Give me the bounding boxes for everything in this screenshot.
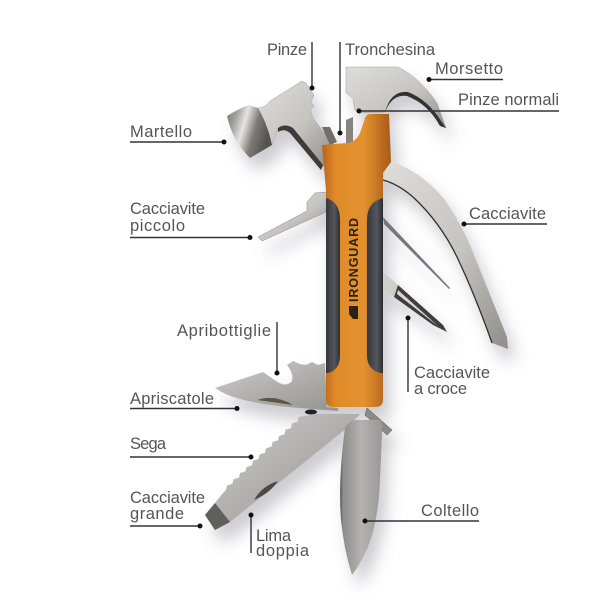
label: Pinze normali: Pinze normali — [458, 91, 559, 109]
tool: hammer — [227, 81, 332, 170]
label: Sega: Sega — [130, 435, 167, 453]
label: Cacciavite a croce — [406, 316, 490, 398]
shadow gap between blades — [305, 410, 317, 414]
label: Tronchesina — [338, 41, 436, 136]
tool: thin rod — [383, 217, 450, 289]
label: Cacciavite: Cacciavite — [469, 205, 546, 223]
label: Martello — [130, 123, 226, 144]
label: Cacciavite grande — [130, 489, 205, 528]
tool: phillips screwdriver — [383, 272, 447, 332]
tool: cacciavite curved — [383, 162, 508, 349]
label: Martello: Martello — [130, 123, 192, 141]
label: Cacciavite grande: Cacciavite — [130, 489, 205, 507]
label: Apriscatole: Apriscatole — [130, 390, 214, 408]
label: Coltello: Coltello — [421, 502, 479, 520]
grip left — [326, 198, 340, 373]
label: Cacciavite piccolo — [130, 200, 252, 240]
tool: knife — [340, 420, 382, 575]
label: Sega — [130, 435, 254, 460]
tool: bottle opener blade — [215, 361, 338, 411]
label: Apribottiglie — [177, 322, 280, 376]
brand: IRONGUARD — [347, 218, 361, 302]
tool: small tab — [365, 408, 392, 435]
label: Pinze normali — [356, 91, 559, 114]
label: Lima doppia: doppia — [256, 542, 310, 560]
label: Pinze — [267, 41, 314, 90]
label: Cacciavite piccolo: piccolo — [130, 217, 185, 235]
label: Cacciavite a croce: a croce — [414, 380, 467, 398]
grip right — [367, 198, 383, 373]
brand logo — [349, 306, 358, 319]
label: Morsetto: Morsetto — [435, 60, 503, 78]
label: Tronchesina: Tronchesina — [345, 41, 436, 59]
tool: saw and file — [205, 414, 360, 530]
label: Cacciavite grande: grande — [130, 505, 184, 523]
curved edge — [383, 180, 492, 343]
label: Cacciavite piccolo: Cacciavite — [130, 200, 205, 218]
multi-tool illustration — [205, 67, 508, 575]
tool: small screwdriver — [258, 192, 327, 241]
handle — [322, 114, 391, 407]
tool: claw — [322, 67, 446, 145]
label: Apriscatole — [130, 390, 240, 411]
label: Apribottiglie: Apribottiglie — [177, 322, 271, 340]
label: Pinze: Pinze — [267, 41, 307, 59]
label: Lima doppia — [248, 512, 310, 560]
label: Cacciavite a croce: Cacciavite — [414, 364, 490, 382]
label: Lima doppia: Lima — [256, 527, 292, 545]
label: Coltello — [362, 502, 479, 524]
